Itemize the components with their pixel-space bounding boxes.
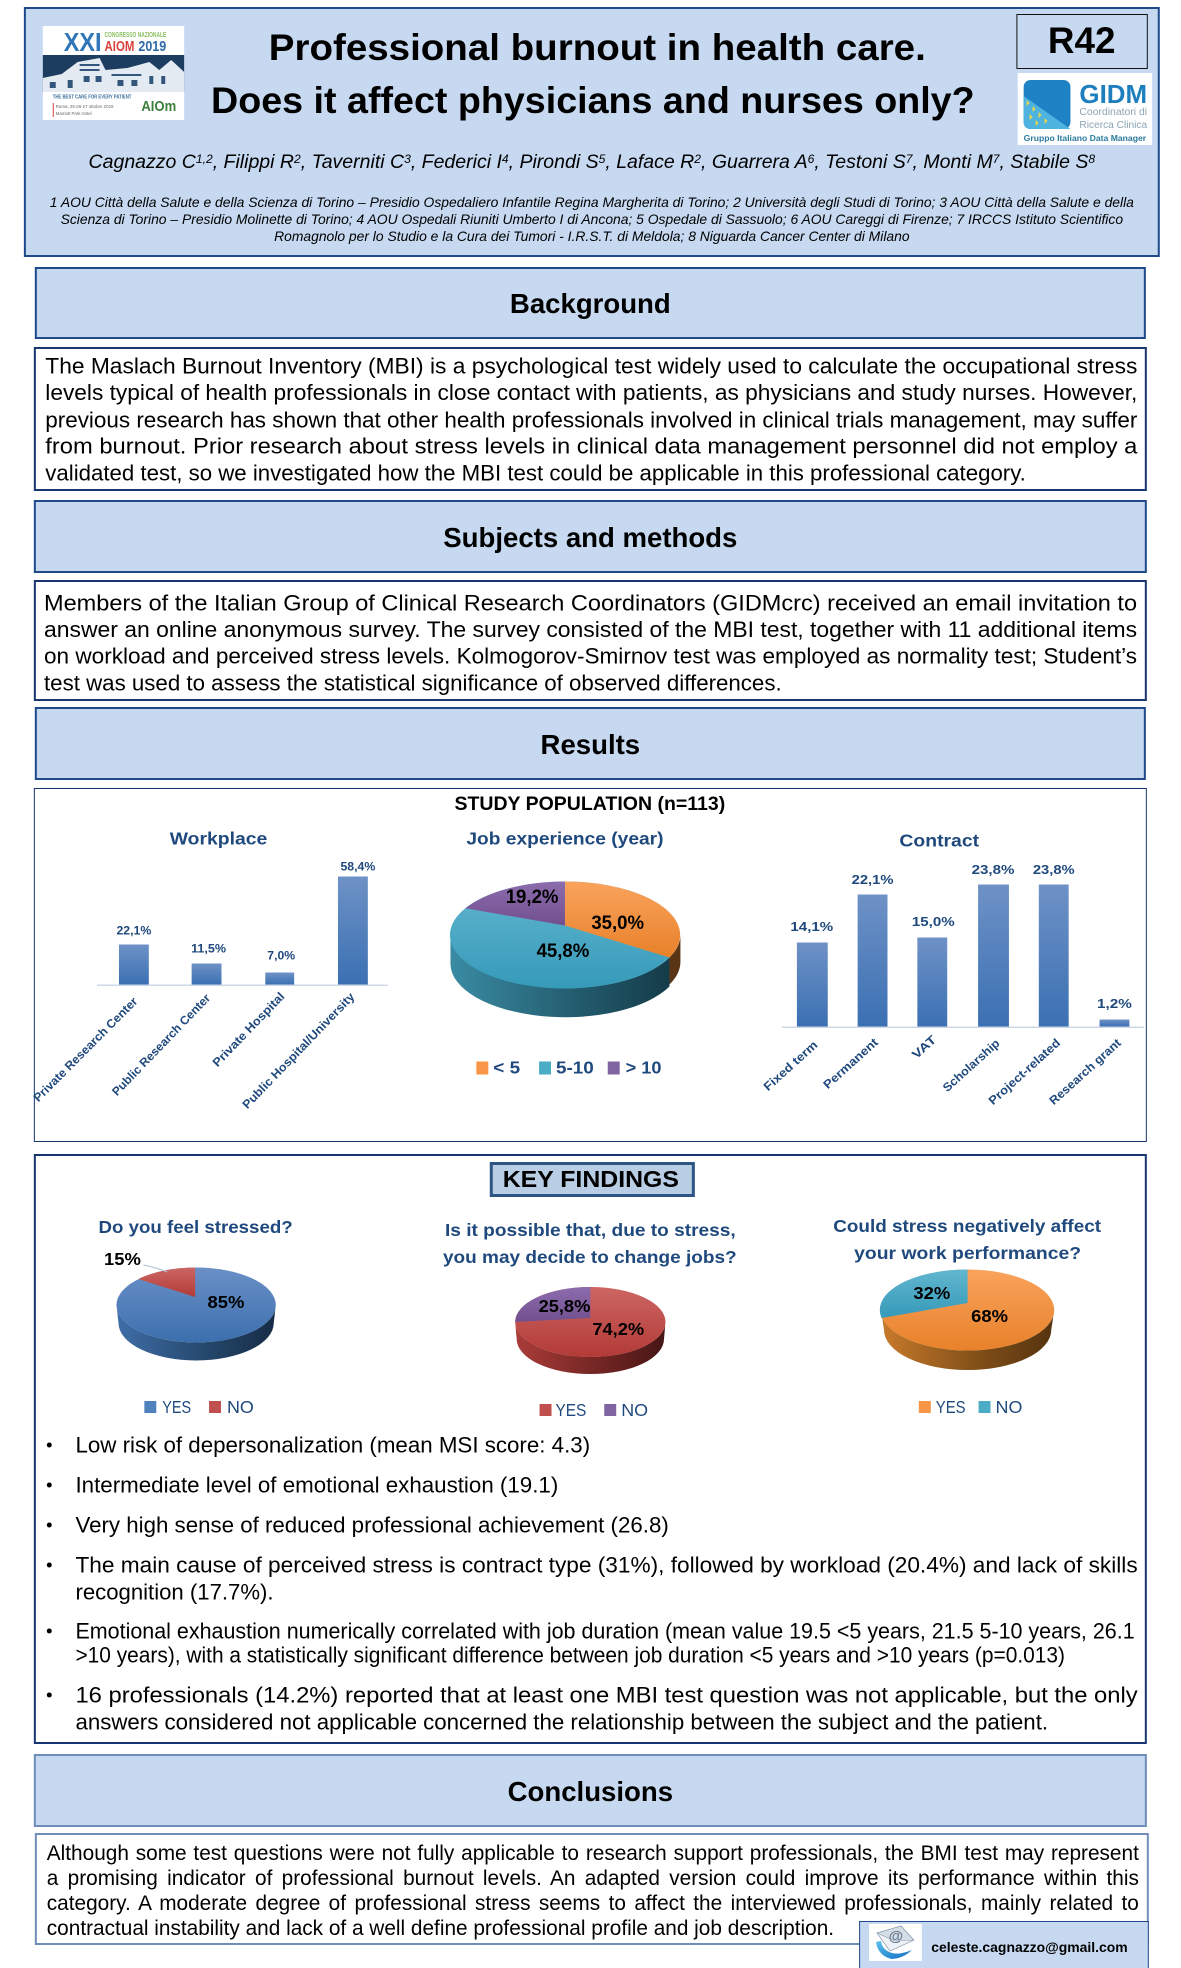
logo: AIOM 2019 congress: AIOm [141,98,176,115]
bar chart: workplace: Private Research Center [31,994,141,1105]
bar chart: contract: 15,0% [912,914,955,929]
pie chart: do you feel stressed [99,1217,293,1417]
heading: Conclusions [34,1754,1147,1827]
logo: AIOM 2019 congress: 2019 [138,38,166,55]
pie chart: job experience [450,828,680,1078]
panel: background text: levels typical of health professionals in close contact with patients, as physicians and study nurses. However, [45,380,1137,405]
contact: email [859,1921,1149,1968]
pie chart: work performance [833,1216,1101,1417]
pie chart: work performance: YES [936,1397,966,1417]
bar chart: workplace: 7,0% [267,950,295,963]
title: Does it affect physicians and nurses only? [211,79,975,121]
pie chart: do you feel stressed: 15% [104,1249,141,1269]
bar chart: workplace: 22,1% [116,925,151,938]
panel: background text: The Maslach Burnout Inventory (MBI) is a psychological test widely used to calculate the occupational stress [45,353,1137,379]
pie chart: change jobs: 74,2% [592,1319,644,1339]
panel: conclusions text: contractual instability and lack of a well define professional profile and job description. [47,1917,834,1940]
heading: Results [35,707,1146,780]
panel: methods text: Members of the Italian Group of Clinical Research Coordinators (GIDMcrc) received an email invitation to [44,590,1137,616]
affiliations: Scienza di Torino – Presidio Molinette di Torino; 4 AOU Ospedali Riuniti Umberto I di Ancona; 5 Ospedale di Sassuolo; 6 AOU Careggi di Firenze; 7 IRCCS Istituto Scientifico [61,211,1123,227]
bar chart: workplace: Private Hospital [210,989,287,1070]
panel: key findings [34,1154,1147,1744]
pie chart: job experience: 5-10 [556,1057,594,1078]
logo: GIDM [1018,73,1152,145]
heading: Background [35,267,1146,339]
label: key findings: KEY FINDINGS [503,1166,679,1192]
logo: AIOM 2019 congress: Marriott Park Hotel [56,111,92,117]
pie chart: work performance: NO [995,1397,1022,1417]
pie chart: job experience: 45,8% [537,941,589,962]
logo: AIOM 2019 congress [42,26,184,120]
reference code R42: R42 [1048,20,1115,61]
pie chart: work performance: your work performance? [854,1243,1081,1263]
pie chart: work performance: Could stress negatively affect [833,1216,1101,1236]
pie chart: job experience: Job experience (year) [466,828,664,849]
panel: conclusions text: a promising indicator of professional burnout levels. An adapted version could improve its performance within this [47,1867,1139,1890]
bar chart: contract: Contract [899,830,979,851]
panel: background text: validated test, so we investigated how the MBI test could be applicable in this professional category. [45,460,1026,486]
title [211,26,975,121]
panel: conclusions text [35,1833,1149,1945]
pie chart: change jobs: Is it possible that, due to stress, [445,1220,736,1240]
bullet list: >10 years), with a statistically significant difference between job duration <5 years and >10 years (p=0.013) [75,1642,1065,1668]
pie chart: change jobs: YES [555,1400,586,1420]
heading: Results: Results [541,729,640,760]
panel: methods text: answer an online anonymous survey. The survey consisted of the MBI test, together with 11 additional items [44,617,1137,642]
bar chart: workplace: Workplace [170,828,267,849]
heading: study population: STUDY POPULATION (n=113) [454,794,725,815]
heading: Subjects and methods: Subjects and methods [443,522,737,553]
logo: GIDM: Gruppo Italiano Data Manager [1023,133,1146,143]
logo: AIOM 2019 congress: Roma, 25-26-27 ottobre 2019 [56,104,114,110]
pie chart: do you feel stressed: YES [162,1397,191,1417]
logo: AIOM 2019 congress: CONGRESSO NAZIONALE [105,32,166,39]
bullet list: answers considered not applicable concerned the relationship between the subject and the patient. [75,1709,1048,1735]
logo: AIOM 2019 congress: AIOM [105,38,134,55]
bar chart: contract: VAT [909,1032,940,1062]
pie chart: change jobs: 25,8% [539,1296,590,1316]
bullet list: The main cause of perceived stress is contract type (31%), followed by workload (20.4%) and lack of skills [75,1552,1138,1578]
bar chart: contract: 1,2% [1097,996,1132,1011]
bar chart: contract: 22,1% [852,872,894,887]
affiliations: 1 AOU Città della Salute e della Scienza di Torino – Presidio Ospedaliero Infantile Regina Margherita di Torino; 2 Università degli Studi di Torino; 3 AOU Città della Salute e della [50,194,1134,210]
panel: methods text: on workload and perceived stress levels. Kolmogorov-Smirnov test was employed as normality test; Student’s [44,643,1137,669]
bullet list: Intermediate level of emotional exhaustion (19.1) [75,1472,558,1498]
pie chart: do you feel stressed: Do you feel stressed? [99,1217,293,1237]
bar chart: workplace: 58,4% [340,861,375,874]
pie chart: work performance: 68% [971,1306,1008,1326]
bar chart: contract: Research grant [1046,1036,1124,1108]
panel: study population [34,788,1147,1142]
logo: AIOM 2019 congress: XXI [64,29,102,57]
affiliations [50,194,1134,244]
pie chart: do you feel stressed: 85% [208,1292,244,1312]
bar chart: workplace: Public Hospital/University [239,989,358,1112]
bullet list: Low risk of depersonalization (mean MSI score: 4.3) [75,1432,590,1458]
bar chart: contract: Project-related [986,1036,1063,1108]
panel: poster header [24,7,1160,257]
bullet list [47,1432,1138,1735]
bullet list: Very high sense of reduced professional achievement (26.8) [75,1512,669,1538]
bar chart: contract: 23,8% [972,862,1015,877]
panel: background text: from burnout. Prior research about stress levels in clinical data management personnel did not employ a [45,433,1138,459]
bar chart: workplace: 11,5% [191,943,226,956]
email address: celeste.cagnazzo@gmail.com [931,1939,1128,1955]
pie chart: work performance: 32% [913,1283,950,1303]
pie chart: job experience: 35,0% [591,913,644,934]
pie chart: change jobs: NO [621,1400,648,1420]
bullet list: Emotional exhaustion numerically correlated with job duration (mean value 19.5 <5 years, 21.5 5-10 years, 26.1 [75,1618,1135,1644]
panel: background text: previous research has shown that other health professionals involved in clinical trials management, may suffer [45,407,1137,433]
heading: Background: Background [510,288,671,319]
pie chart: job experience: > 10 [626,1057,662,1078]
affiliations: Romagnolo per lo Studio e la Cura dei Tumori - I.R.S.T. di Meldola; 8 Niguarda Cancer Center di Milano [274,228,910,244]
pie chart: change jobs [443,1220,737,1420]
title: Professional burnout in health care. [269,26,926,68]
logo: GIDM: Ricerca Clinica [1079,120,1147,131]
panel: methods text: test was used to assess the statistical significance of observed differences. [44,670,782,696]
bullet list: 16 professionals (14.2%) reported that at least one MBI test question was not applicable, but the only [75,1682,1138,1708]
pie chart: do you feel stressed: NO [227,1397,254,1417]
bar chart: workplace [31,828,388,1112]
bar chart: contract [761,830,1144,1108]
heading: Conclusions: Conclusions [508,1776,673,1807]
icon: email envelope [869,1924,922,1961]
bar chart: contract: 14,1% [790,919,834,934]
bar chart: contract: 23,8% [1033,862,1075,877]
panel: methods text [34,580,1147,701]
authors: Cagnazzo C1,2, Filippi R2, Taverniti C3, Federici I4, Pirondi S5, Laface R2, Guarrera A6, Testoni S7, Monti M7, Stabile S8 [89,151,1095,173]
logo: GIDM: Coordinatori di [1079,107,1147,118]
reference code R42 [1016,14,1147,69]
bar chart: contract: Fixed term [761,1038,820,1094]
bullet list: recognition (17.7%). [75,1579,274,1605]
panel: background text [34,347,1147,491]
heading: Subjects and methods [34,500,1147,573]
pie chart: change jobs: you may decide to change jobs? [443,1247,737,1267]
bar chart: contract: Scholarship [940,1036,1002,1095]
logo: GIDM: GIDM [1079,81,1147,109]
pie chart: job experience: < 5 [493,1057,520,1078]
bar chart: contract: Permanent [820,1035,881,1092]
logo: AIOM 2019 congress: THE BEST CARE FOR EVERY PATIENT [53,94,132,101]
bar chart: workplace: Public Research Center [109,991,213,1099]
panel: conclusions text: Although some test questions were not fully applicable to research support professionals, the BMI test may represent [47,1842,1139,1865]
pie chart: job experience: 19,2% [506,887,559,908]
icon: email envelope: @ [888,1927,903,1945]
panel: conclusions text: category. A moderate degree of professional stress seems to affect the interviewed professionals, mainly related to [47,1892,1139,1915]
label: key findings [491,1164,693,1196]
